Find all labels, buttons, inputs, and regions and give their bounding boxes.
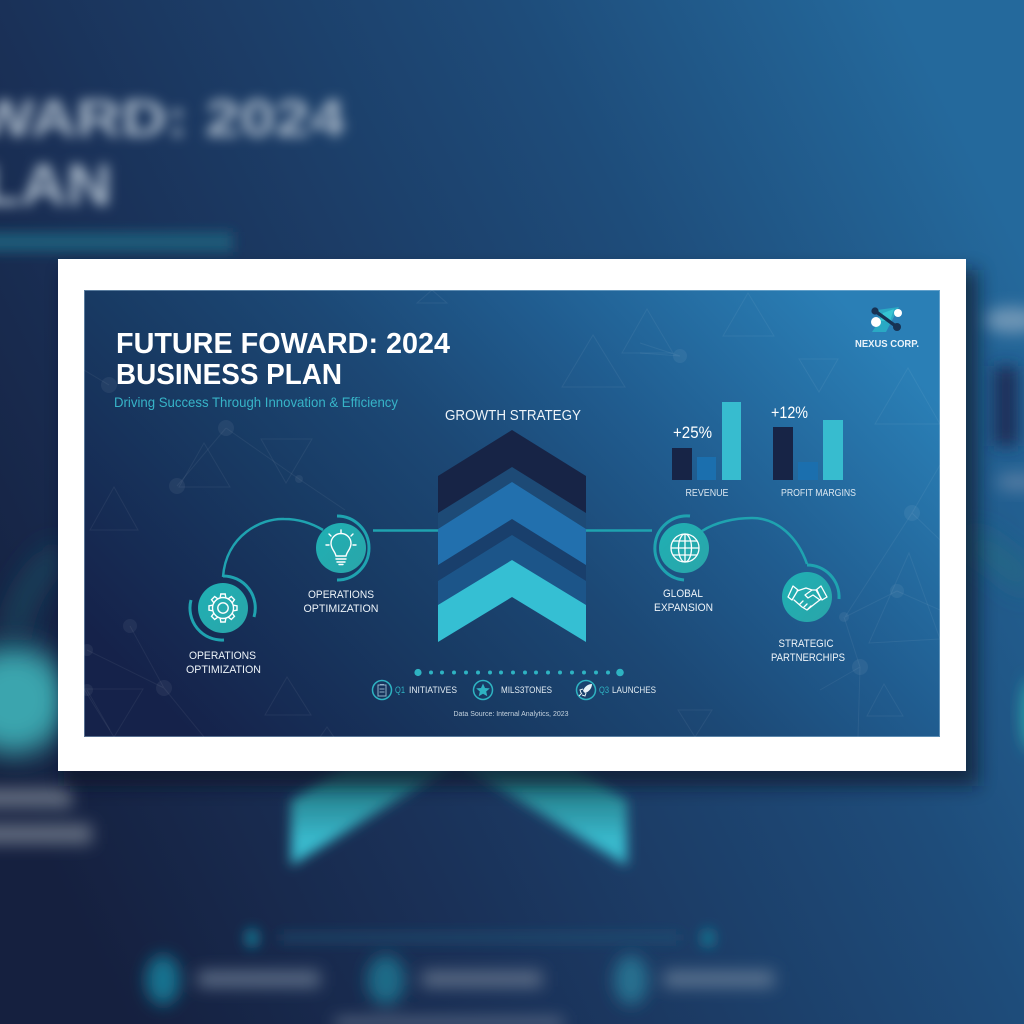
legend text: Q3 [599,685,609,695]
timeline dots [414,669,624,676]
label: lightbulb node: OPERATIONS [308,589,374,601]
legend: Q3 launches [576,680,656,700]
chevron: blue [438,482,586,565]
chevron: navy [438,430,586,513]
slide panel [81,290,940,740]
icon: star [474,680,492,700]
title: BUSINESS PLAN [116,359,342,391]
legend text: LAUNCHES [612,685,656,695]
white card [58,259,966,771]
label: handshake node: PARTNERCHIPS [771,652,845,664]
bar chart: profit margins: PROFIT MARGINS [781,488,856,499]
logo mark [871,307,902,332]
title [116,328,450,391]
bar chart: profit margins: +12% [771,403,808,422]
blurred connector left [12,552,62,640]
blurred gear circle [0,646,68,754]
title: FUTURE FOWARD: 2024 [116,328,450,360]
card shadow [64,270,978,786]
chevron: mid blue [438,535,586,606]
blurred subtitle [0,232,233,252]
blurred right items [966,307,1024,751]
bar chart: revenue [672,402,741,499]
chevron shadow bands [438,467,586,529]
label: gear node: OPTIMIZATION [186,664,261,676]
legend text: INITIATIVES [409,685,457,695]
label: globe node [654,588,713,614]
icon: handshake [788,586,827,610]
chevron stack [438,430,586,642]
icon: gear [209,594,237,622]
icon: clipboard [372,680,392,700]
chevron: cyan [438,560,586,642]
node: globe [654,516,713,614]
growth strategy heading: GROWTH STRATEGY [445,407,581,424]
connector lines [223,518,807,577]
label: globe node: EXPANSION [654,602,713,614]
subtitle: Driving Success Through Innovation & Efficiency [114,394,398,410]
bar chart: revenue: REVENUE [686,488,729,499]
logo [855,307,919,350]
bar chart: profit margins [771,403,856,499]
legend text: Q1 [395,685,405,695]
icon: globe [671,534,699,562]
blurred title [0,90,345,218]
icon: rocket [576,680,596,700]
source note: Data Source: Internal Analytics, 2023 [454,711,569,718]
label: handshake node: STRATEGIC [778,638,834,650]
label: gear node: OPERATIONS [189,650,256,662]
legend: Q1 initiatives [372,680,457,700]
icon: lightbulb [326,530,356,564]
label: lightbulb node: OPTIMIZATION [304,603,379,615]
blurred chevron [291,700,627,866]
blurred legend [146,955,774,1024]
logo name: NEXUS CORP. [855,339,919,350]
label: handshake node [771,638,845,664]
blurred timeline [245,928,715,948]
label: lightbulb node [304,589,379,615]
legend: milestones [474,680,552,700]
network pattern [81,290,940,740]
bar chart: revenue: +25% [673,423,712,442]
label: gear node [186,650,261,676]
node: lightbulb [304,516,379,615]
legend text: MILS3TONES [501,685,552,695]
label: globe node: GLOBAL [663,588,703,600]
blurred label left [0,788,92,844]
node: gear [186,576,261,676]
node: handshake [771,565,845,664]
